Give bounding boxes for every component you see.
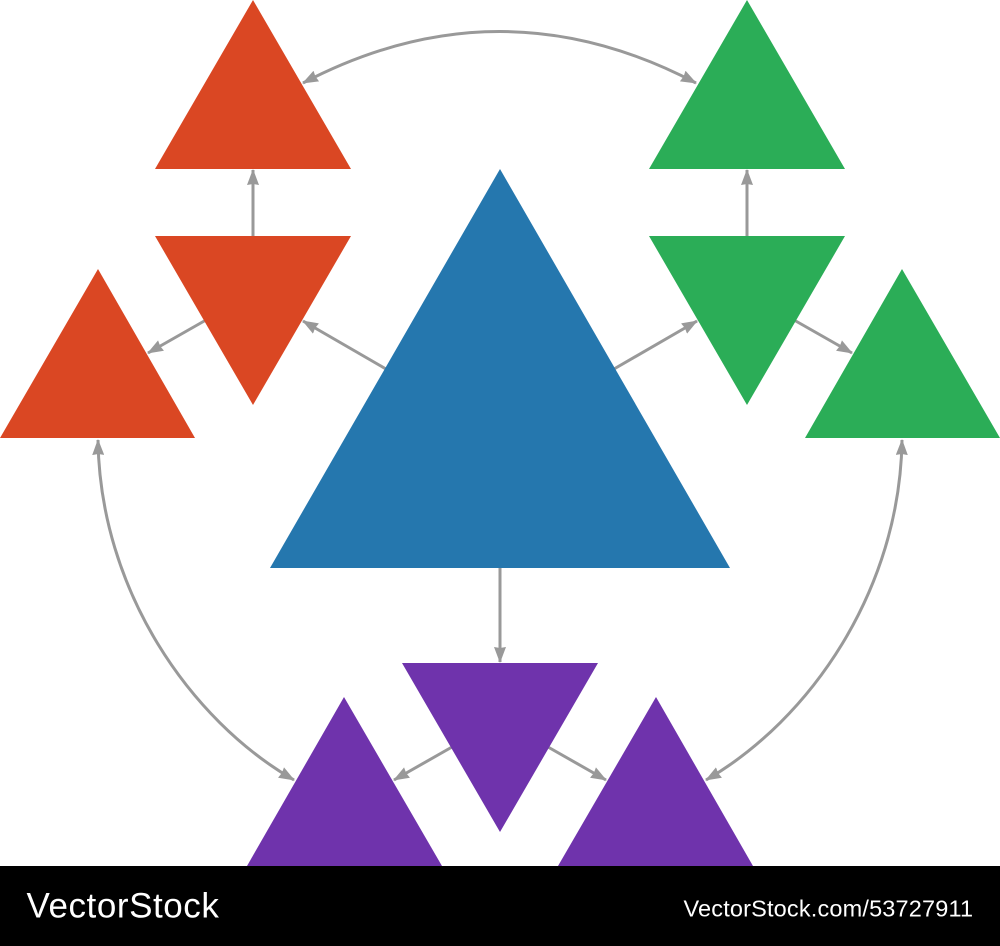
central blue triangle [270, 169, 730, 568]
arrow: red inverted to red left [148, 320, 206, 353]
green triangle right [805, 269, 1000, 438]
arrow: top arc between red and green [303, 32, 696, 83]
green inverted triangle [649, 236, 845, 405]
green triangle top [649, 0, 845, 169]
purple triangle left [247, 697, 442, 866]
arrow: purple inverted to purple right [548, 747, 606, 780]
arrow: green inverted to green top [746, 170, 748, 237]
red triangle top [155, 0, 351, 169]
arrow: blue to red [303, 321, 386, 369]
watermark brand: VectorStock [26, 886, 219, 926]
watermark url: VectorStock.com/53727911 [684, 896, 973, 922]
red inverted triangle [155, 236, 351, 405]
arrow: left arc between red and purple [98, 440, 294, 780]
purple triangle right [558, 697, 753, 866]
arrow: green inverted to green right [794, 320, 852, 353]
watermark footer bar [0, 866, 1000, 946]
arrow: right arc between green and purple [706, 440, 902, 780]
arrow: blue to purple [498, 567, 502, 662]
red triangle left [0, 269, 195, 438]
arrow: red inverted to red top [252, 170, 254, 237]
arrow: purple inverted to purple left [394, 747, 452, 780]
arrow: blue to green [614, 321, 697, 369]
purple inverted triangle [402, 663, 598, 832]
